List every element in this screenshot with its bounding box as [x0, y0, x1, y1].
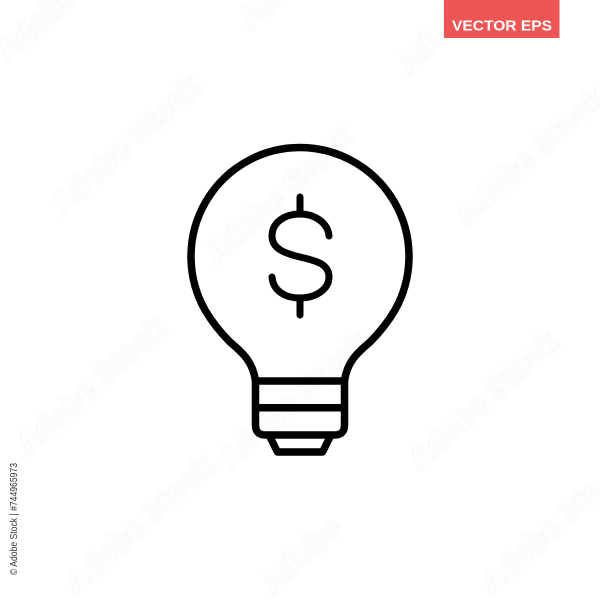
- stock credit text: © Adobe Stock | #744965973: [8, 463, 20, 575]
- badge: vector eps: VECTOR EPS: [452, 18, 552, 34]
- watermark pattern: Adobe Stock: [199, 120, 361, 270]
- watermark pattern: Adobe Stock: [403, 325, 565, 475]
- watermark pattern: Adobe: [255, 512, 347, 599]
- bulb base with bands: [256, 381, 344, 435]
- icon: light bulb with dollar sign: [191, 148, 409, 452]
- bulb cap: [270, 437, 330, 452]
- watermark pattern: Adobe Stock: [59, 449, 221, 599]
- bulb glass outline: [191, 148, 409, 381]
- icon: dollar sign: [272, 197, 329, 315]
- watermark pattern: Adobe Stock: [213, 325, 375, 475]
- watermark pattern: Adobe Stock: [45, 70, 207, 220]
- watermark pattern: Adobe Stock: [11, 311, 173, 461]
- badge: vector eps: [444, 0, 560, 38]
